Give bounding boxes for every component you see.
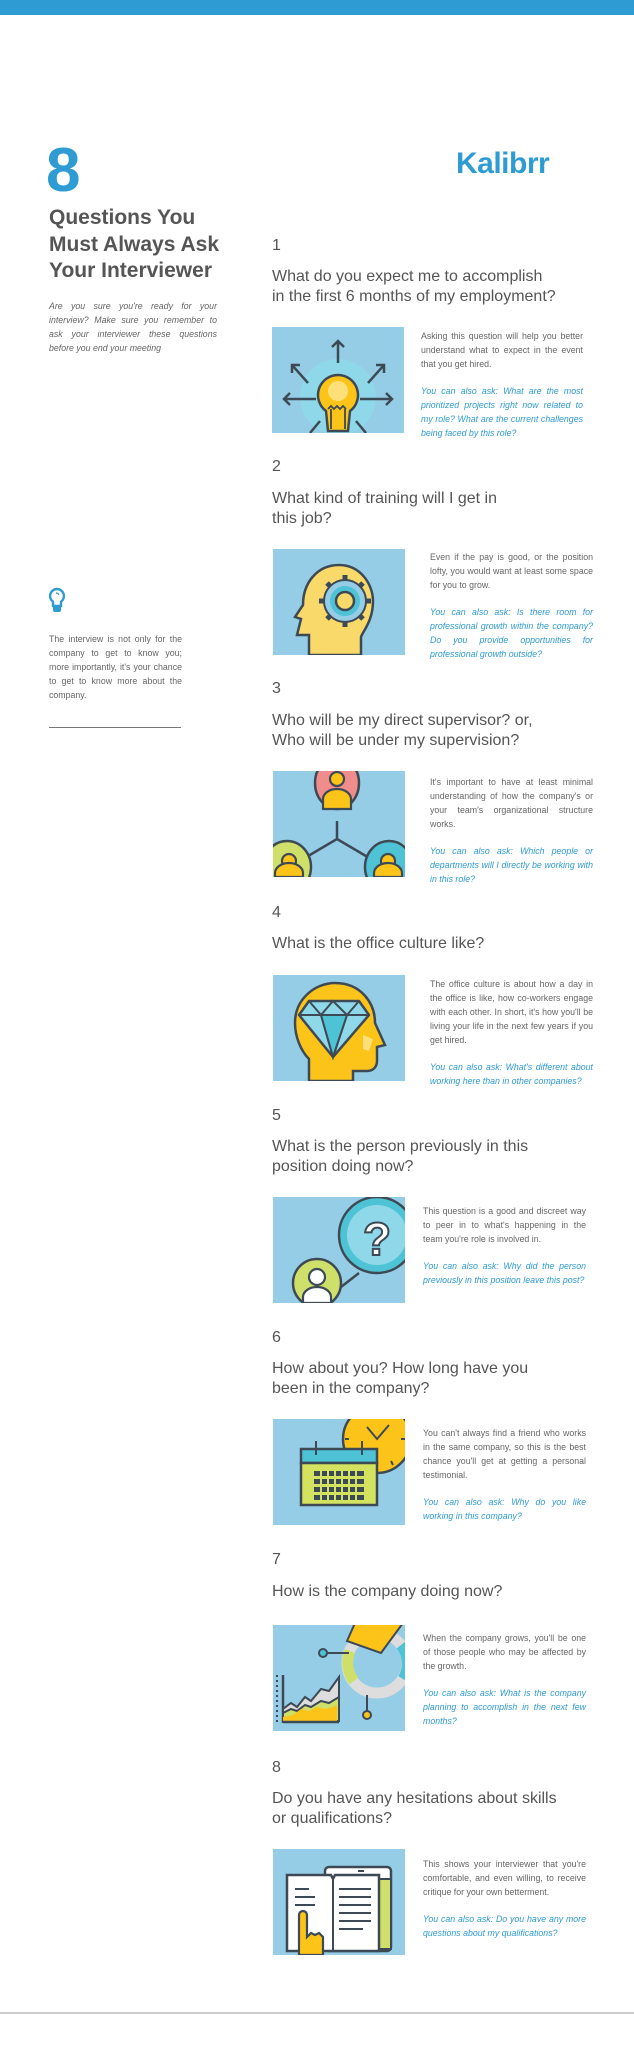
icon: head with diamond — [273, 975, 405, 1081]
title: Questions You — [49, 206, 195, 229]
number 3: 3 — [272, 680, 281, 697]
text 5: This question is a good and discreet way to peer in to what's happening in the team you're role is involved in. — [423, 1206, 586, 1244]
icon: org chart people — [273, 771, 405, 877]
text 8: You can also ask: Do you have any more questions about my qualifications? — [423, 1914, 586, 1938]
text 7: When the company grows, you'll be one of those people who may be affected by the growth. — [423, 1633, 586, 1671]
text 2: You can also ask: Is there room for professional growth within the company? Do you provide opportunities for professional growth outside? — [430, 607, 593, 659]
text 2 — [430, 552, 594, 659]
icon: head with gear — [273, 549, 405, 655]
number 7: 7 — [272, 1551, 281, 1568]
text 5: You can also ask: Why did the person previously in this position leave this post? — [423, 1261, 586, 1285]
text 1: You can also ask: What are the most prioritized projects right now related to my role? What are the current challenges being faced by this role? — [421, 386, 583, 438]
text 8 — [423, 1859, 586, 1938]
text 4 — [430, 979, 594, 1086]
question 8 heading: or qualifications? — [272, 1810, 392, 1827]
section 5 — [272, 1107, 586, 1303]
top bar — [0, 0, 634, 15]
intro text: Are you sure you're ready for your interview? Make sure you remember to ask your interviewer these questions before you end your meeting — [49, 301, 217, 353]
text 6 — [423, 1428, 586, 1521]
text 3: You can also ask: Which people or departments will I directly be working with in this role? — [430, 846, 593, 884]
number 5: 5 — [272, 1107, 281, 1124]
question 6 heading: been in the company? — [272, 1380, 429, 1397]
text 2: Even if the pay is good, or the position lofty, you would want at least some space for you to grow. — [430, 552, 593, 590]
question 8 heading — [272, 1790, 557, 1827]
icon: chart and donut — [273, 1625, 405, 1731]
title — [49, 206, 219, 282]
question 5 heading: What is the person previously in this — [272, 1138, 528, 1155]
text 8: This shows your interviewer that you're comfortable, and even willing, to receive critique for your own betterment. — [423, 1859, 586, 1897]
icon: sidebar lightbulb — [48, 588, 66, 612]
sidebar note: The interview is not only for the company to get to know you; more importantly, it's your chance to get to know more about the company. — [49, 634, 182, 700]
question 5 heading: position doing now? — [272, 1158, 413, 1175]
text 3 — [430, 777, 594, 884]
question 6 heading: How about you? How long have you — [272, 1360, 528, 1377]
number 4: 4 — [272, 904, 281, 921]
question 6 heading — [272, 1360, 528, 1397]
text 4: The office culture is about how a day in the office is like, how co-workers engage with each other. In short, it's how you'll be living your life in the next few years if you get hired. — [430, 979, 593, 1045]
icon: question bubble — [273, 1197, 405, 1303]
question 4 heading: What is the office culture like? — [272, 935, 484, 952]
section 1 — [272, 237, 584, 438]
section 4 — [272, 904, 594, 1086]
number 2: 2 — [272, 458, 281, 475]
number 1: 1 — [272, 237, 281, 254]
number 6: 6 — [272, 1329, 281, 1346]
question 8 heading: Do you have any hesitations about skills — [272, 1790, 557, 1807]
text 6: You can also ask: Why do you like working in this company? — [423, 1497, 586, 1521]
question 2 heading — [272, 490, 497, 527]
question 5 heading — [272, 1138, 528, 1175]
text 7 — [422, 1633, 586, 1726]
question 3 heading: Who will be my direct supervisor? or, — [272, 712, 533, 729]
question 2 heading: What kind of training will I get in — [272, 490, 497, 507]
section 7 — [272, 1551, 586, 1731]
footer rule — [0, 2012, 634, 2014]
question 7 heading: How is the company doing now? — [272, 1583, 502, 1600]
text 6: You can't always find a friend who works in the same company, so this is the best chance you'll get at getting a personal testimonial. — [423, 1428, 586, 1480]
text 5 — [422, 1206, 586, 1285]
icon: book and hand — [273, 1849, 405, 1955]
icon: question bubble: ? — [363, 1213, 391, 1265]
icon: calendar and clock — [273, 1419, 405, 1525]
question 1 heading: What do you expect me to accomplish — [272, 268, 542, 285]
text 4: You can also ask: What's different about working here than in other companies? — [430, 1062, 593, 1086]
question 3 heading — [272, 712, 533, 749]
question 1 heading — [272, 268, 556, 305]
section 6 — [272, 1329, 586, 1525]
logo: Kalibrr: Kalibrr — [456, 147, 549, 180]
section 3 — [272, 680, 594, 884]
text 3: It's important to have at least minimal understanding of how the company's or your team's organizational structure works. — [430, 777, 593, 829]
title: Your Interviewer — [49, 259, 212, 282]
question 1 heading: in the first 6 months of my employment? — [272, 288, 556, 305]
icon: lightbulb with arrows — [272, 327, 404, 433]
question 2 heading: this job? — [272, 510, 332, 527]
section 8 — [272, 1759, 586, 1955]
question 3 heading: Who will be under my supervision? — [272, 732, 519, 749]
text 1: Asking this question will help you better understand what to expect in the event that you get hired. — [421, 331, 583, 369]
number 8: 8 — [272, 1759, 281, 1776]
text 7: You can also ask: What is the company planning to accomplish in the next few months? — [423, 1688, 586, 1726]
big number 8: 8 — [46, 136, 80, 205]
text 1 — [420, 331, 584, 438]
title: Must Always Ask — [49, 232, 219, 256]
section 2 — [272, 458, 594, 659]
